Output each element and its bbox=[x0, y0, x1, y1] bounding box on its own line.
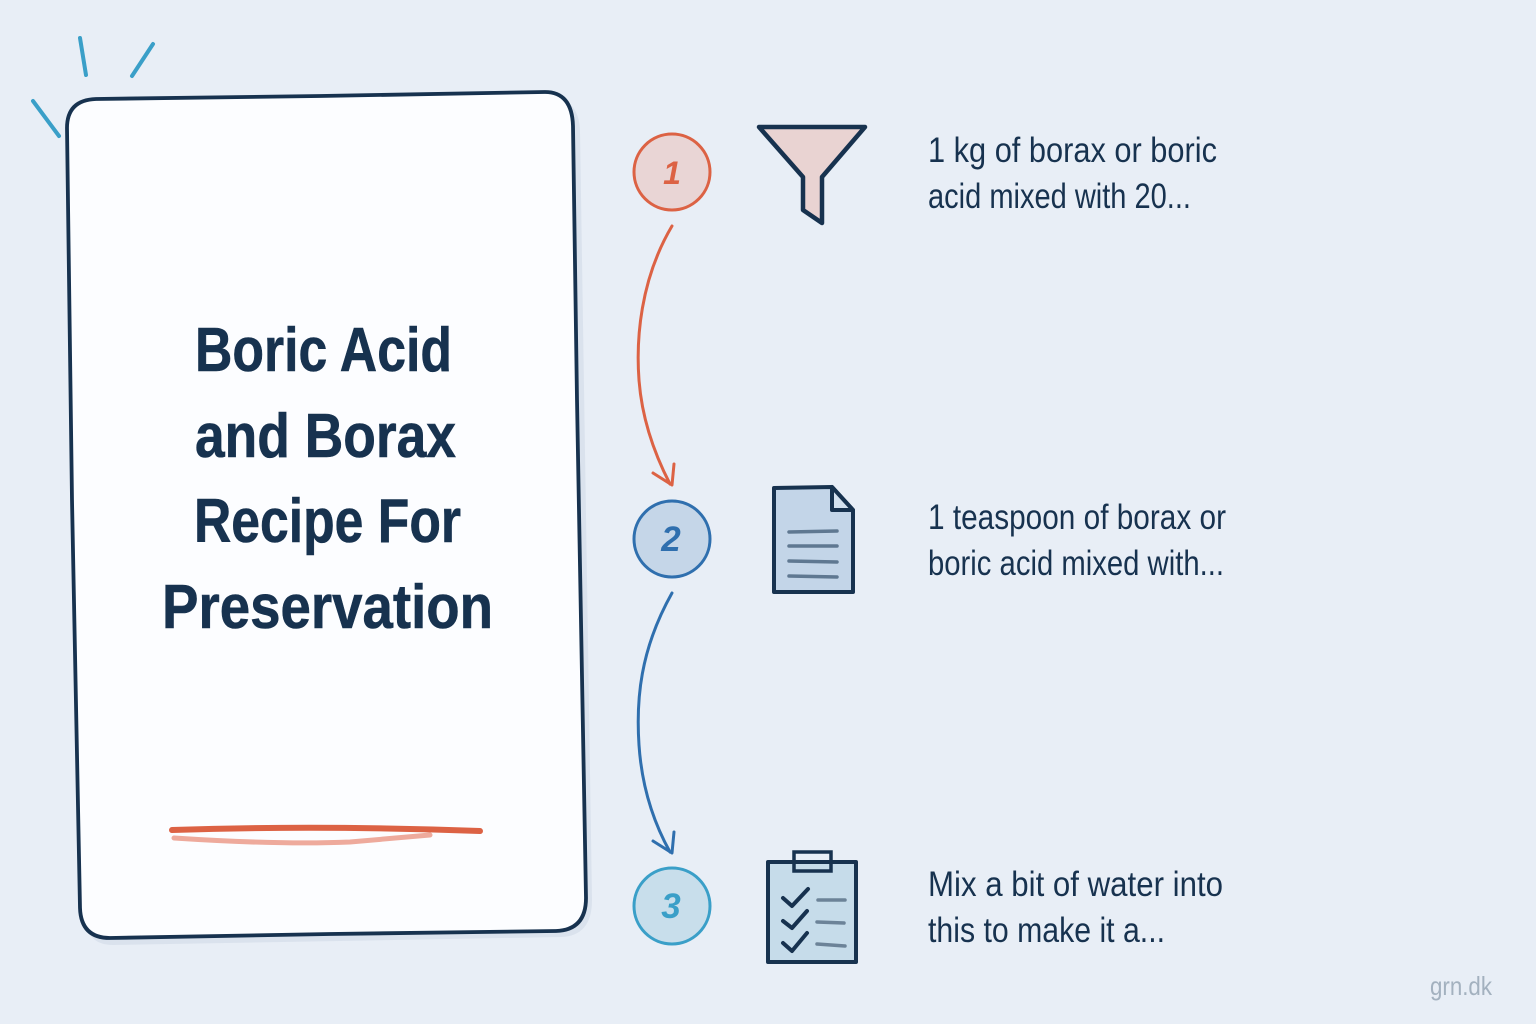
icon: document bbox=[774, 487, 853, 592]
title: Recipe For bbox=[194, 487, 461, 556]
title: Preservation bbox=[162, 573, 493, 642]
title: and Borax bbox=[195, 402, 456, 471]
step 3 number badge: 3 bbox=[661, 887, 681, 926]
icon: clipboard checklist bbox=[768, 852, 856, 962]
title bbox=[162, 316, 493, 642]
watermark: grn.dk bbox=[1430, 971, 1493, 1001]
step 1 number badge: 1 bbox=[663, 155, 681, 191]
title underline bbox=[172, 828, 480, 843]
title: Boric Acid bbox=[195, 316, 452, 385]
step 2 text bbox=[928, 498, 1226, 583]
step 3 number badge bbox=[634, 868, 710, 944]
step 3 text bbox=[928, 865, 1223, 950]
step 1 text: 1 kg of borax or boric bbox=[928, 131, 1217, 170]
arrow: step 1 to step 2 bbox=[638, 226, 674, 485]
step 3 text: this to make it a... bbox=[928, 911, 1165, 950]
step 1 text: acid mixed with 20... bbox=[928, 177, 1191, 216]
step 2 text: 1 teaspoon of borax or bbox=[928, 498, 1226, 537]
step 3 text: Mix a bit of water into bbox=[928, 865, 1223, 904]
step 2 number badge bbox=[634, 501, 710, 577]
step 1 text bbox=[928, 131, 1217, 216]
arrow: step 2 to step 3 bbox=[638, 593, 674, 853]
step 1 number badge bbox=[634, 134, 710, 210]
icon: funnel bbox=[759, 127, 865, 223]
panel: title card bbox=[67, 92, 592, 945]
step 2 number badge: 2 bbox=[660, 520, 681, 559]
step 2 text: boric acid mixed with... bbox=[928, 544, 1224, 583]
icon: sparkle accent lines bbox=[33, 38, 153, 136]
